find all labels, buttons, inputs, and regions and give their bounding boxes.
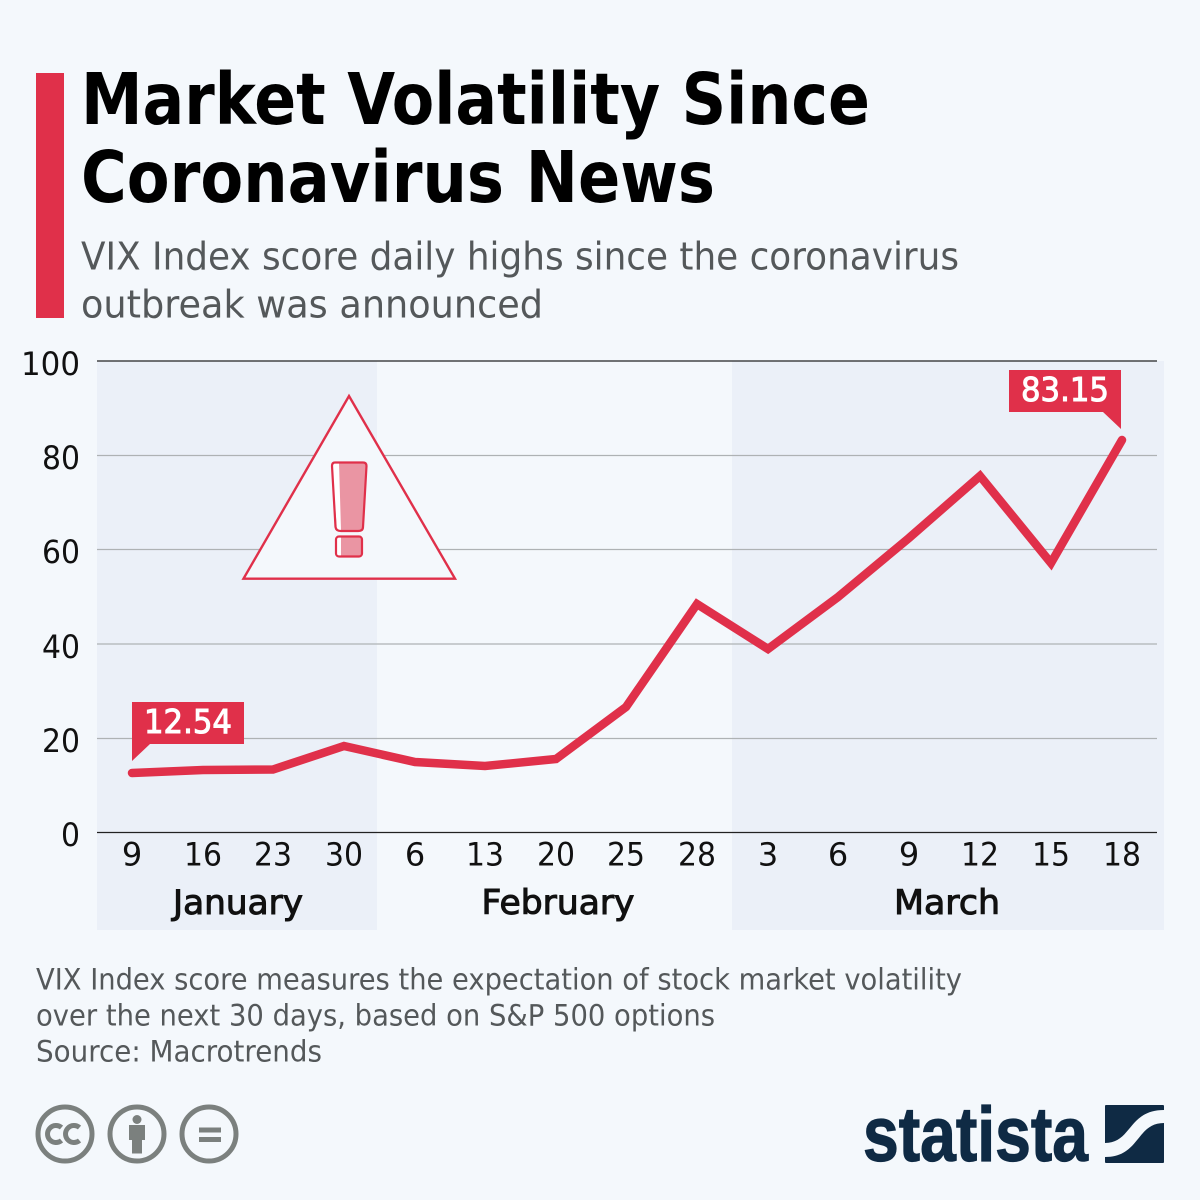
- y axis labels: 60: [42, 533, 80, 571]
- callout: 83.15: [1009, 370, 1121, 429]
- x axis labels: 12: [961, 836, 999, 874]
- x axis labels: 23: [254, 836, 292, 874]
- y axis labels: 0: [61, 816, 80, 854]
- month labels: March: [894, 883, 1000, 923]
- icon: attribution: [110, 1107, 164, 1161]
- x axis labels: 6: [405, 836, 425, 874]
- x axis labels: 6: [828, 836, 848, 874]
- title: Coronavirus News: [81, 136, 715, 219]
- x axis labels: 20: [537, 836, 575, 874]
- footnote and source: over the next 30 days, based on S&P 500 options: [36, 998, 715, 1032]
- x axis labels: 28: [678, 836, 716, 874]
- y axis labels: [21, 345, 80, 854]
- icon: no derivatives: [182, 1107, 236, 1161]
- title: [81, 58, 870, 219]
- x axis labels: 16: [184, 836, 222, 874]
- month bands: [97, 361, 1164, 930]
- callout: 12.54: [132, 702, 244, 761]
- chart: [21, 345, 1164, 930]
- x axis labels: 9: [899, 836, 919, 874]
- warning triangle icon: [244, 396, 455, 579]
- subtitle: VIX Index score daily highs since the coronavirus: [81, 234, 959, 278]
- callout: 83.15: 83.15: [1021, 370, 1109, 409]
- x axis labels: 30: [325, 836, 363, 874]
- x axis labels: 15: [1032, 836, 1070, 874]
- y axis labels: 80: [42, 439, 80, 477]
- x axis labels: 9: [122, 836, 142, 874]
- y axis labels: 100: [21, 345, 80, 383]
- footnote and source: VIX Index score measures the expectation of stock market volatility: [36, 962, 962, 996]
- icon: creative commons: [38, 1107, 92, 1161]
- x axis labels: 3: [758, 836, 778, 874]
- month labels: January: [171, 883, 303, 923]
- x axis labels: 25: [607, 836, 645, 874]
- month labels: February: [482, 883, 634, 923]
- footnote and source: [36, 962, 962, 1068]
- y axis labels: 40: [42, 628, 80, 666]
- title accent bar: [36, 73, 64, 318]
- y axis labels: 20: [42, 722, 80, 760]
- subtitle: outbreak was announced: [81, 282, 543, 326]
- statista logo: statista: [863, 1092, 1089, 1178]
- footnote and source: Source: Macrotrends: [36, 1034, 322, 1068]
- title: Market Volatility Since: [81, 58, 870, 141]
- data line: [132, 440, 1122, 773]
- x axis labels: 18: [1103, 836, 1141, 874]
- x axis labels: 13: [466, 836, 504, 874]
- x axis labels: [122, 836, 1141, 874]
- callout: 12.54: 12.54: [144, 702, 232, 741]
- month labels: [171, 883, 1000, 923]
- subtitle: [81, 234, 959, 326]
